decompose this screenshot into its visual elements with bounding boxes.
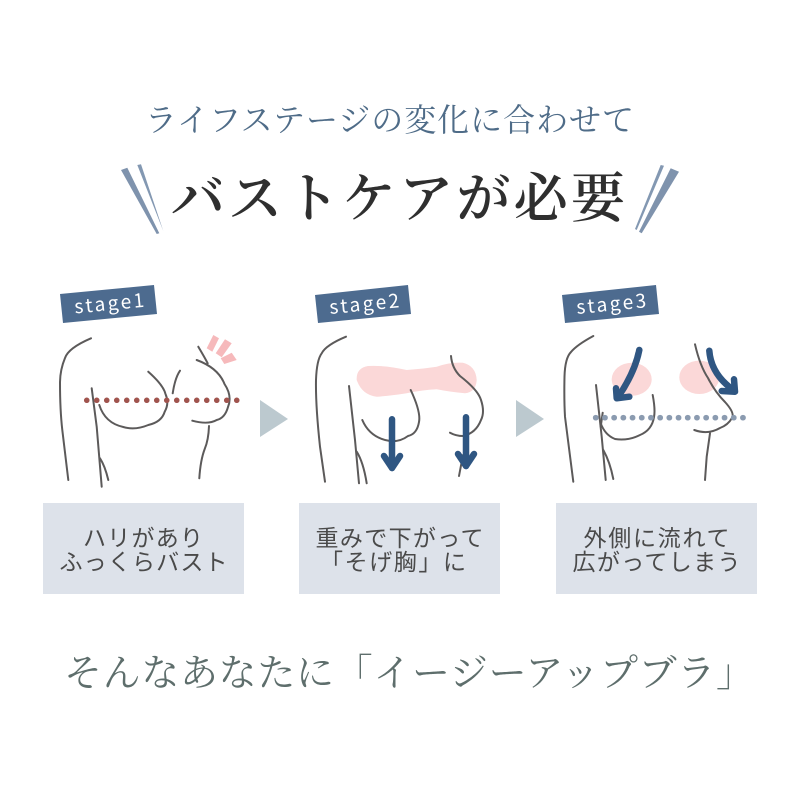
stage 3 tag <box>562 285 659 323</box>
stage 2 body illustration <box>316 337 483 483</box>
arrow: right down <box>458 417 474 466</box>
arrow: left down <box>384 419 400 468</box>
stage 1 body illustration <box>60 338 230 487</box>
subtitle: ライフステージの変化に合わせて <box>145 102 634 138</box>
stage 2 tag: stage2 <box>328 286 400 320</box>
stage 1 tag <box>60 285 157 323</box>
arrow: stage 1 to 2 <box>260 400 288 437</box>
icon: firmness marks <box>207 335 237 364</box>
caption box: stage 3 <box>556 503 757 594</box>
arrow: left outward <box>616 350 639 398</box>
panel: stage 3 <box>562 285 743 482</box>
arrow: stage 2 to 3 <box>516 400 544 437</box>
caption box: stage 1 <box>43 503 244 594</box>
caption box: stage 2 <box>299 503 500 594</box>
caption box: stage 1: ふっくらバスト <box>60 549 228 575</box>
stage 3 body illustration <box>564 336 733 482</box>
pink highlight right <box>679 361 719 394</box>
pink highlight <box>357 363 477 397</box>
closing line: そんなあなたに「イージーアップブラ」 <box>64 653 754 695</box>
caption box: stage 3: 広がってしまう <box>572 549 740 575</box>
stage 2 tag <box>315 285 411 323</box>
caption box: stage 2: 重みで下がって <box>316 525 484 551</box>
dotted bust line <box>87 398 237 403</box>
icon: right accent strokes <box>635 165 679 233</box>
dotted bust line <box>596 415 743 421</box>
arrow: right outward <box>709 351 735 392</box>
panel: stage 1 <box>60 285 237 487</box>
title: バストケアが必要 <box>171 169 626 229</box>
panel: stage 2 <box>315 285 483 483</box>
stage 3 tag: stage3 <box>575 286 647 320</box>
caption box: stage 2: 「そげ胸」に <box>320 549 466 575</box>
stage 1 tag: stage1 <box>73 286 145 319</box>
icon: left accent strokes <box>121 164 163 234</box>
caption box: stage 1: ハリがあり <box>83 525 203 551</box>
caption box: stage 3: 外側に流れて <box>584 525 730 551</box>
pink highlight left <box>612 363 652 396</box>
